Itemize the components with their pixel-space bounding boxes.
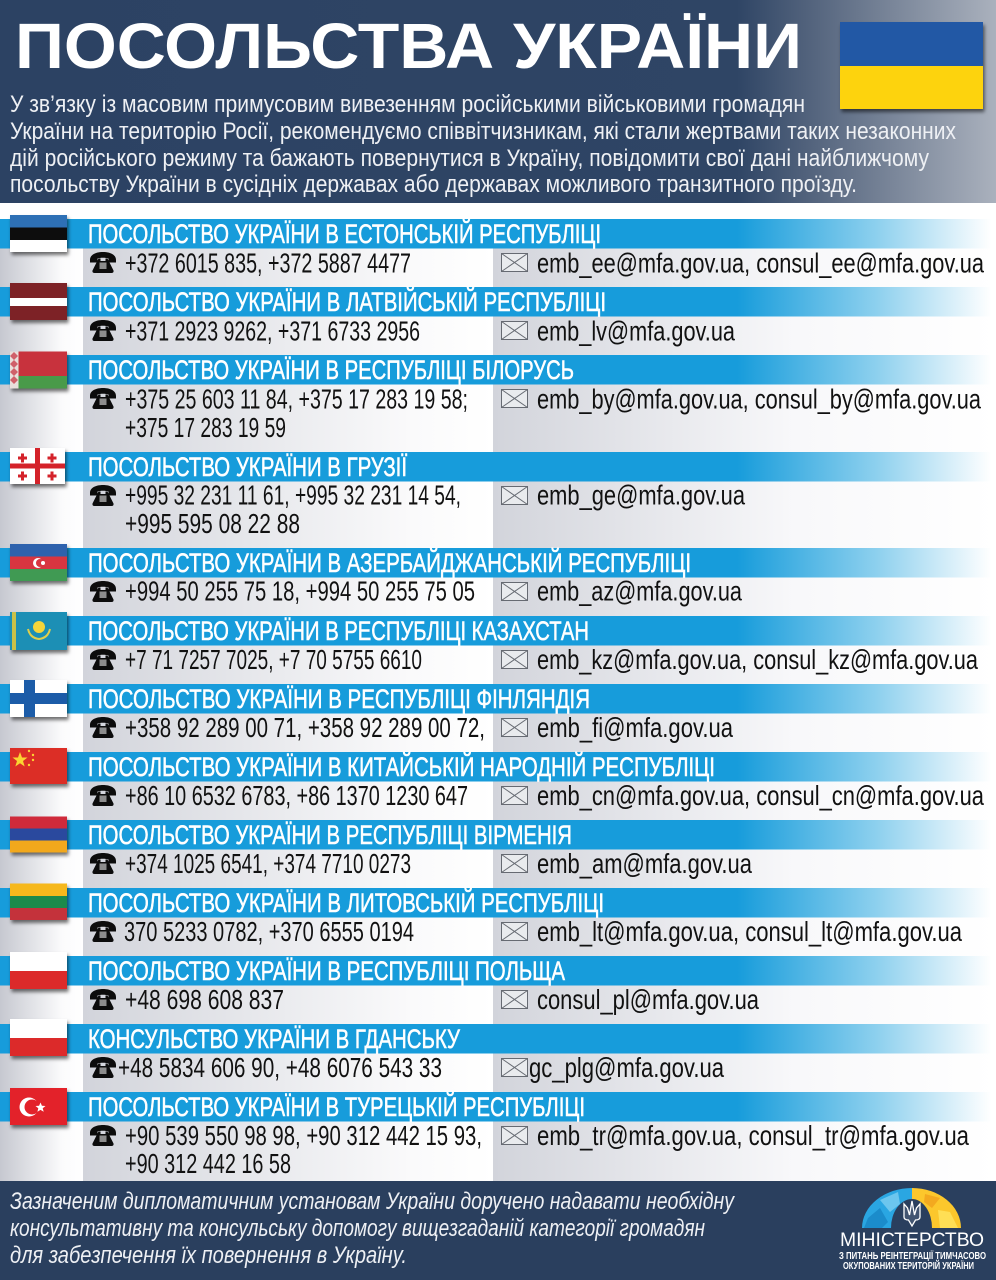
row: Georgia: emb_ge@mfa.gov.ua bbox=[537, 480, 746, 510]
row: Turkey: +90 539 550 98 98, +90 312 442 15 93, bbox=[125, 1120, 482, 1151]
row: Gdansk consulate: +48 5834 606 90, +48 6076 543 33 bbox=[118, 1052, 442, 1083]
row: Armenia bbox=[0, 816, 996, 888]
row: Estonia: ПОСОЛЬСТВО УКРАЇНИ В ЕСТОНСЬКІЙ РЕСПУБЛІЦІ bbox=[88, 218, 601, 249]
footer text: для забезпечення їх повернення в Україну. bbox=[10, 1242, 407, 1269]
flag: Latvia bbox=[10, 283, 67, 320]
flag: Lithuania bbox=[10, 884, 67, 920]
row: Estonia bbox=[0, 215, 996, 287]
flag: Estonia bbox=[10, 215, 67, 252]
row: Lithuania bbox=[0, 884, 996, 956]
row: Azerbaijan: emb_az@mfa.gov.ua bbox=[537, 576, 743, 606]
footer panel bbox=[0, 1181, 996, 1280]
flag: Armenia bbox=[10, 816, 67, 852]
row: Armenia: +374 1025 6541, +374 7710 0273 bbox=[125, 848, 411, 879]
header panel bbox=[0, 0, 996, 203]
intro text: У зв’язку із масовим примусовим вивезенням російськими військовими громадян bbox=[10, 91, 805, 118]
flag: Turkey bbox=[10, 1088, 67, 1125]
flag: Georgia bbox=[10, 448, 65, 484]
row: China: +86 10 6532 6783, +86 1370 1230 647 bbox=[125, 780, 468, 811]
row: Latvia bbox=[0, 283, 996, 355]
flag: Poland (Gdansk) bbox=[10, 1019, 67, 1056]
row: Estonia: +372 6015 835, +372 5887 4477 bbox=[125, 248, 411, 278]
row: Belarus: ПОСОЛЬСТВО УКРАЇНИ В РЕСПУБЛІЦІ БІЛОРУСЬ bbox=[88, 355, 574, 385]
row: Kazakhstan: ПОСОЛЬСТВО УКРАЇНИ В РЕСПУБЛІЦІ КАЗАХСТАН bbox=[88, 616, 589, 646]
row: Georgia: +995 595 08 22 88 bbox=[125, 508, 300, 539]
row: Turkey: ПОСОЛЬСТВО УКРАЇНИ В ТУРЕЦЬКІЙ РЕСПУБЛІЦІ bbox=[88, 1091, 585, 1122]
row: Armenia: ПОСОЛЬСТВО УКРАЇНИ В РЕСПУБЛІЦІ ВІРМЕНІЯ bbox=[88, 820, 572, 850]
row: Kazakhstan: +7 71 7257 7025, +7 70 5755 6610 bbox=[125, 644, 422, 675]
row: Georgia bbox=[0, 448, 996, 548]
flag: Kazakhstan bbox=[10, 612, 67, 650]
row: Gdansk consulate bbox=[0, 1019, 996, 1092]
row: Turkey: +90 312 442 16 58 bbox=[125, 1148, 291, 1179]
title: ПОСОЛЬСТВА УКРАЇНИ bbox=[15, 10, 802, 82]
logo: ministry bbox=[839, 1188, 986, 1272]
row: Finland bbox=[0, 680, 996, 752]
row: Lithuania: 370 5233 0782, +370 6555 0194 bbox=[124, 916, 414, 947]
row: China bbox=[0, 748, 996, 820]
row: Azerbaijan bbox=[0, 544, 996, 616]
row: Latvia: emb_lv@mfa.gov.ua bbox=[537, 316, 736, 346]
logo title: МІНІСТЕРСТВО bbox=[840, 1230, 984, 1251]
row: Georgia: +995 32 231 11 61, +995 32 231 14 54, bbox=[125, 480, 461, 510]
footer text: Зазначеним дипломатичним установам України доручено надавати необхідну bbox=[10, 1188, 736, 1215]
row: Belarus bbox=[0, 352, 996, 452]
flag: Finland bbox=[10, 680, 67, 717]
row: Finland: ПОСОЛЬСТВО УКРАЇНИ В РЕСПУБЛІЦІ ФІНЛЯНДІЯ bbox=[88, 684, 590, 714]
row: Latvia: +371 2923 9262, +371 6733 2956 bbox=[125, 316, 420, 346]
intro text bbox=[10, 91, 956, 198]
footer text bbox=[10, 1188, 736, 1269]
row: Turkey bbox=[0, 1088, 996, 1181]
row: Poland: +48 698 608 837 bbox=[125, 984, 284, 1015]
row: Poland: consul_pl@mfa.gov.ua bbox=[537, 984, 760, 1015]
row: Poland bbox=[0, 952, 996, 1024]
row: China: ПОСОЛЬСТВО УКРАЇНИ В КИТАЙСЬКІЙ НАРОДНІЙ РЕСПУБЛІЦІ bbox=[88, 751, 715, 782]
row: Kazakhstan bbox=[0, 612, 996, 684]
flag: Poland bbox=[10, 952, 67, 989]
flag: China bbox=[10, 748, 67, 784]
row: Gdansk consulate: КОНСУЛЬСТВО УКРАЇНИ В ГДАНСЬКУ bbox=[88, 1024, 461, 1054]
intro text: посольству України в сусідніх державах або державах можливого транзитного проїзду. bbox=[10, 171, 857, 198]
row: Latvia: ПОСОЛЬСТВО УКРАЇНИ В ЛАТВІЙСЬКІЙ РЕСПУБЛІЦІ bbox=[88, 286, 606, 317]
logo subtitle bbox=[839, 1249, 986, 1272]
flag: Belarus bbox=[10, 352, 67, 388]
row: Poland: ПОСОЛЬСТВО УКРАЇНИ В РЕСПУБЛІЦІ ПОЛЬЩА bbox=[88, 956, 565, 986]
icon: trident bbox=[904, 1201, 920, 1226]
icon: Ukrainian flag bbox=[840, 22, 983, 109]
icon: arch bbox=[862, 1188, 961, 1228]
row: Armenia: emb_am@mfa.gov.ua bbox=[537, 848, 753, 879]
footer text: консультативну та консульську допомогу вищезгаданій категорії громадян bbox=[10, 1215, 705, 1242]
row: Lithuania: ПОСОЛЬСТВО УКРАЇНИ В ЛИТОВСЬКІЙ РЕСПУБЛІЦІ bbox=[88, 887, 604, 918]
flag: Azerbaijan bbox=[10, 544, 67, 581]
row: Belarus: +375 17 283 19 59 bbox=[125, 412, 286, 443]
row: Finland: +358 92 289 00 71, +358 92 289 00 72, bbox=[125, 712, 485, 743]
row: Finland: emb_fi@mfa.gov.ua bbox=[537, 712, 734, 743]
row: Gdansk consulate: gc_plg@mfa.gov.ua bbox=[529, 1052, 725, 1083]
row: Azerbaijan: +994 50 255 75 18, +994 50 255 75 05 bbox=[125, 576, 475, 606]
row: Georgia: ПОСОЛЬСТВО УКРАЇНИ В ГРУЗІЇ bbox=[88, 452, 407, 482]
row: Belarus: +375 25 603 11 84, +375 17 283 19 58; bbox=[125, 384, 468, 414]
row: Azerbaijan: ПОСОЛЬСТВО УКРАЇНИ В АЗЕРБАЙДЖАНСЬКІЙ РЕСПУБЛІЦІ bbox=[88, 547, 691, 578]
